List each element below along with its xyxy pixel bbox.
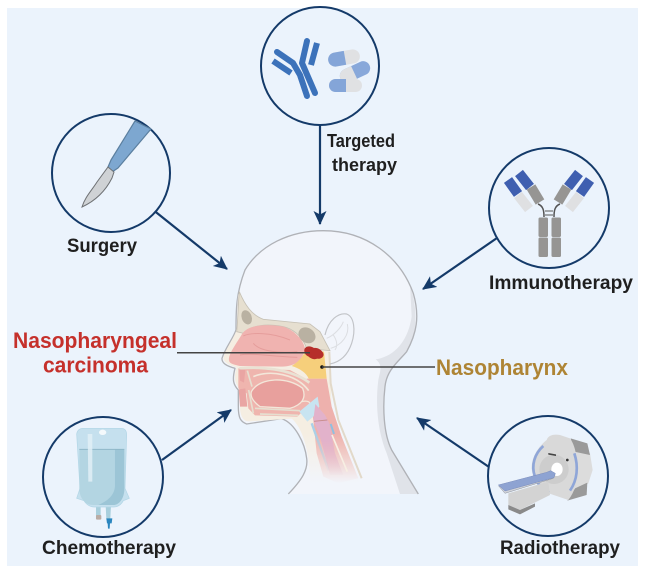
tongue: [251, 380, 304, 408]
label: targeted therapy: Targeted: [327, 131, 395, 151]
pill two: [338, 59, 372, 85]
antibody: [273, 41, 317, 96]
ear: [325, 314, 354, 364]
palate arc: [253, 373, 309, 391]
tubes: [96, 505, 111, 519]
grey cap: [96, 515, 101, 520]
table side: [499, 474, 555, 493]
pill one: [327, 48, 361, 68]
leader line: nasopharyngeal carcinoma: [177, 352, 310, 354]
bore: [539, 455, 569, 484]
head silhouette fill: [222, 231, 418, 494]
label: targeted therapy: therapy: [332, 155, 397, 175]
bag body: [77, 428, 129, 507]
display: [548, 453, 556, 456]
label: nasopharyngeal carcinoma: carcinoma: [43, 352, 148, 378]
frontal sinus: [239, 309, 254, 326]
tumour: [304, 346, 324, 359]
neck shadow: [376, 283, 418, 494]
scalpel blade: [82, 167, 114, 207]
antibody fragments: [508, 173, 590, 217]
label: immunotherapy: Immunotherapy: [489, 273, 633, 294]
fluid level: [79, 448, 124, 451]
scanner rear bottom: [567, 483, 587, 501]
scanner rear light: [573, 451, 593, 490]
patient table: [498, 471, 555, 491]
icon: immunotherapy antibody: [489, 148, 609, 268]
blue ring right: [570, 453, 577, 491]
sphenoid sinus: [295, 324, 319, 346]
spine edge: [329, 352, 362, 478]
airway lining: [312, 423, 329, 471]
label: radiotherapy: Radiotherapy: [500, 538, 620, 559]
ear inner folds: [327, 322, 348, 350]
arrow: radiotherapy: [417, 418, 489, 467]
head outline: [222, 231, 418, 494]
hanger hole: [99, 430, 106, 435]
label: nasopharynx: Nasopharynx: [436, 355, 569, 380]
icon: radiotherapy MRI scanner: [488, 416, 608, 536]
antibody stem: [538, 218, 561, 257]
fluid shade: [98, 449, 124, 505]
table base: [508, 482, 550, 510]
leader line: nasopharynx: [320, 365, 435, 369]
icon: targeted therapy antibody and pills: [261, 7, 379, 125]
nasopharynx region: [292, 352, 327, 379]
epiglottis strip: [331, 424, 334, 434]
table base strip: [508, 503, 535, 514]
skull and sinus bone: [237, 292, 330, 351]
cricoid: [314, 420, 327, 421]
nasal turbinates: [240, 334, 297, 357]
trachea: [313, 404, 343, 475]
palate: [239, 368, 309, 383]
soft palate hook: [301, 401, 310, 412]
blue tip: [106, 518, 112, 529]
label: chemotherapy: Chemotherapy: [42, 538, 176, 559]
icon: chemotherapy IV bag: [43, 417, 163, 537]
scalpel handle: [108, 121, 151, 172]
teeth and jaw: [247, 371, 300, 415]
label: surgery: Surgery: [67, 236, 137, 257]
arrow: surgery: [152, 209, 227, 269]
nasal cavity: [229, 325, 305, 367]
larynx blue tissue: [299, 397, 319, 422]
pill three: [329, 79, 362, 92]
bore hole: [551, 463, 563, 476]
scanner body: [532, 435, 577, 500]
icon: surgery scalpel: [52, 114, 170, 232]
upper lip and lower lip: [239, 369, 247, 407]
blue ring left: [533, 446, 549, 492]
neck cartilage: [332, 435, 347, 472]
scanner rear top: [571, 438, 590, 455]
arrow: targeted therapy: [319, 125, 321, 224]
head anatomy illustration: [222, 231, 418, 494]
oral cavity: [238, 368, 311, 417]
pharynx and oesophagus: [307, 379, 358, 483]
fluid: [79, 449, 124, 505]
arrow: chemotherapy: [162, 410, 231, 460]
indicator: [566, 459, 569, 461]
label: nasopharyngeal carcinoma: Nasopharyngeal: [13, 328, 177, 353]
arrow: immunotherapy: [423, 238, 497, 289]
highlight: [88, 434, 92, 482]
face skin: [223, 294, 360, 483]
